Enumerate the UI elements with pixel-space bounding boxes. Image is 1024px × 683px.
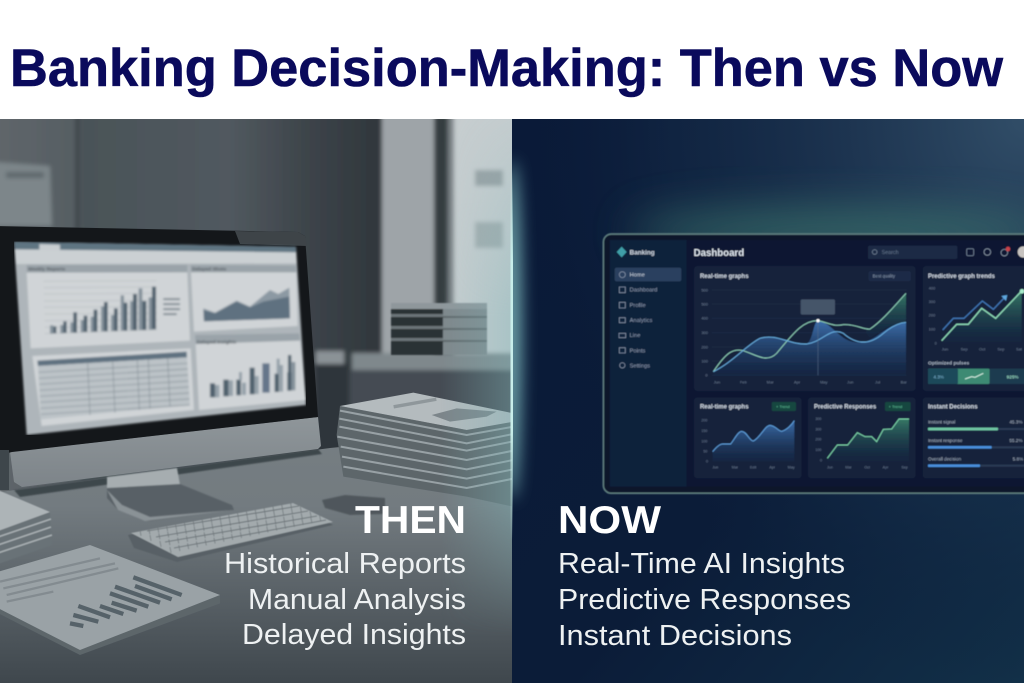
card: instant decisions [923,397,1024,478]
card: real-time graphs main: 0 [705,373,708,378]
card: real-time graphs main: Bar [901,379,908,384]
sidebar: Points [630,348,646,354]
card: predictive graph trends: 400 [929,285,936,290]
now list: Real-Time AI Insights [558,548,845,580]
card: real-time graphs small: Apr [769,466,776,470]
sidebar: Line [630,333,640,339]
card: real-time graphs main: Jul [875,379,880,384]
card: real-time graphs main: Jun [714,379,720,384]
sidebar: Analytics [630,318,652,324]
panel: weekly reports chart [27,265,190,348]
now list [560,552,850,646]
left-side tint toward divider [454,142,512,604]
card: predictive graph trends: Sat [1016,347,1023,352]
monitor [0,226,322,521]
card: real-time graphs main: Apr [794,379,801,384]
top-right lighter haze [662,119,1024,234]
panel: delayed insights chart [195,333,306,410]
card: instant decisions: Instant response [928,438,963,443]
monitor stand [107,468,234,521]
card: instant decisions: 45.3% [1009,420,1023,425]
card: predictive graph trends: Jun [942,347,948,352]
card: instant decisions: Overall decision [928,456,962,461]
card: real-time graphs main: Best quality [873,274,896,279]
card: real-time graphs main [694,266,916,391]
mouse [322,495,385,515]
green glow behind dashboard [630,210,1024,254]
then heading: THEN [355,499,466,542]
then list [224,548,466,651]
monitor bezel [0,226,318,456]
card: real-time graphs main: Real-time graphs [700,274,749,280]
card: predictive graph trends [923,266,1024,391]
now list: Instant Decisions [558,620,792,652]
card: real-time graphs main: Mar [767,379,774,384]
now list: Predictive Responses [558,584,851,616]
dashboard header [694,246,1024,259]
card: predictive graph trends: 200 [929,313,936,318]
card: predictive responses: Jun [827,466,833,470]
card: real-time graphs main: 100 [701,358,709,363]
card: real-time graphs small: May [788,466,795,470]
card: real-time graphs small: Jun [712,466,718,470]
card: predictive responses: Oct [864,466,870,470]
then list: Manual Analysis [248,584,466,616]
card: predictive responses: 100 [815,448,821,452]
card: predictive responses: Sep [901,466,908,470]
desk [0,430,512,683]
card: predictive responses [808,397,916,478]
sidebar: Profile [630,303,646,309]
keyboard [128,503,333,562]
card: predictive graph trends: Oct [979,347,986,352]
card: real-time graphs small: 0 [706,460,708,464]
card: real-time graphs main: 500 [701,301,709,306]
sidebar: Dashboard [630,288,657,294]
dark navy background [512,119,1024,683]
card: predictive graph trends: Sep [997,347,1005,352]
card: real-time graphs main: May [820,379,828,384]
card: real-time graphs main: Feb [740,379,748,384]
title: Banking Decision-Making: Then vs Now [10,39,1004,98]
card: real-time graphs small: + Trend [776,404,790,409]
sidebar: Home [630,272,645,278]
foreground paper with bar chart [0,545,220,655]
card: predictive graph trends: 4.3% [933,374,944,379]
stack of paper reports [337,393,513,507]
card: predictive responses: + Trend [889,404,902,409]
card: predictive graph trends: Optimized pulses [928,361,969,367]
monitor frame [603,234,1024,493]
card: predictive responses: 200 [815,438,821,442]
tooltip [801,299,835,315]
card: predictive responses: 300 [815,417,821,421]
card: real-time graphs main: 200 [701,344,709,349]
card: predictive responses: 300 [815,427,821,431]
card: instant decisions: 5.8% [1013,456,1023,461]
card: real-time graphs small: 100 [701,439,707,443]
card: instant decisions: Instant Decisions [928,405,978,411]
sidebar: Settings [630,363,650,369]
panel: delayed shots area chart [191,265,298,332]
card: instant decisions: 55.2% [1009,438,1023,443]
card: real-time graphs main: 400 [701,316,709,321]
panel: delayed insights chart: Delayed Insights [197,339,237,345]
then list: Delayed Insights [242,619,466,651]
card: predictive responses: Mar [845,466,852,470]
card: real-time graphs small: 50 [703,449,707,453]
card: predictive responses: Apr [883,466,889,470]
card: real-time graphs main: 300 [701,330,709,335]
card: predictive responses: Predictive Responses [814,405,877,411]
sidebar: Banking [630,249,655,256]
logo [617,247,627,257]
card: predictive responses: 0 [820,459,822,463]
panel: now [512,119,1024,683]
now heading: NOW [558,499,661,542]
panel: data table [32,348,194,426]
card: real-time graphs main: Jun [847,379,853,384]
glowing divider [503,160,521,540]
card: real-time graphs small: Edit [750,466,756,470]
card: real-time graphs small: 200 [701,418,707,422]
background stack of files [391,303,487,355]
panel: weekly reports chart: Weekly Reports [28,267,66,273]
card: predictive graph trends: 925% [1007,374,1019,379]
monitor chin [10,417,321,487]
panel: then [0,115,517,683]
card: real-time graphs small: Real-time graphs [700,405,749,411]
left paper stack [0,490,52,554]
sidebar [610,240,687,487]
card: real-time graphs small [694,397,802,478]
card: real-time graphs small: Mar [732,466,739,470]
card: predictive graph trends: Sep [961,347,969,352]
bars [50,287,156,334]
card: real-time graphs main: 500 [701,287,709,292]
dashboard header: Dashboard [694,248,744,259]
panel: delayed shots area chart: Delayed Shots [192,267,227,273]
card: predictive graph trends: 300 [929,299,936,304]
desk shadow below monitor [14,449,322,497]
then list: Historical Reports [224,548,466,580]
card: predictive graph trends: 100 [929,326,936,331]
card: predictive graph trends: 0 [935,340,938,345]
card: predictive graph trends: Predictive graph trends [928,274,996,280]
card: instant decisions: Instant signal [928,420,955,425]
dashboard monitor [603,234,1024,493]
photo background: office wall and window [0,115,517,515]
dashboard header: Search [882,250,899,256]
screen: spreadsheet reports [14,242,306,435]
card: real-time graphs small: 150 [701,429,707,433]
